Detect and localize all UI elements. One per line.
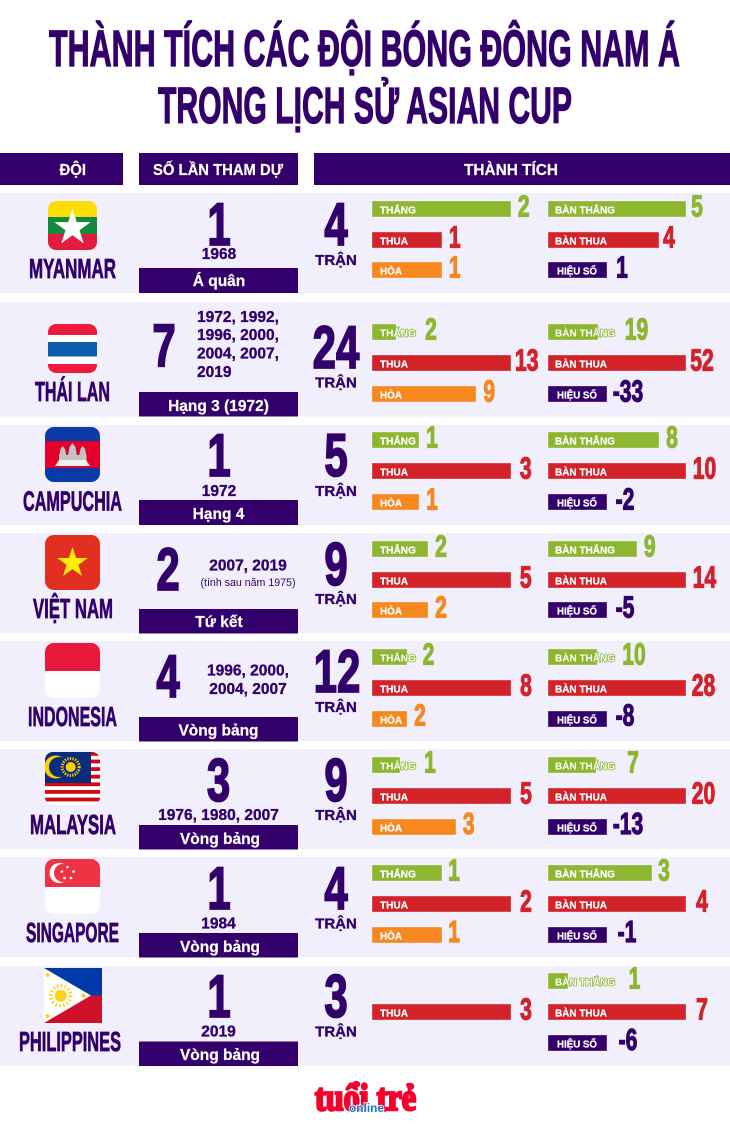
stat: wins: 1 — [426, 419, 438, 455]
stat: goal difference — [548, 481, 634, 517]
best result — [139, 268, 298, 293]
stat: losses — [372, 667, 532, 703]
stat: goals for — [548, 636, 646, 672]
best result: Vòng bảng — [178, 722, 259, 740]
matches: 24 — [313, 314, 360, 381]
stat: goal difference: -1 — [618, 914, 636, 949]
matches: TRẬN — [315, 698, 357, 716]
stat: losses: 5 — [520, 775, 532, 811]
stat: goals for: 5 — [691, 188, 703, 224]
participation count: 3 — [207, 747, 230, 814]
best result: Hạng 4 — [193, 506, 245, 523]
years — [197, 309, 279, 381]
stat: goals against: 14 — [693, 559, 716, 595]
matches — [315, 422, 357, 500]
stat: losses: 3 — [520, 450, 532, 486]
stat: goal difference — [548, 806, 643, 841]
stat: goals against — [548, 667, 715, 703]
stat: losses: 8 — [520, 667, 532, 703]
stat: goals for: BÀN THẮNG — [555, 652, 615, 664]
years: 1972 — [202, 483, 236, 500]
stat: losses: THUA — [380, 1008, 408, 1020]
stat: goal difference: 1 — [616, 249, 628, 285]
stat: goal difference: HIỆU SỐ — [557, 264, 597, 278]
stat: goals against — [548, 450, 716, 486]
stat: draws: 2 — [414, 697, 426, 733]
stat: goal difference: HIỆU SỐ — [557, 496, 597, 510]
stat: goal difference: -5 — [616, 589, 634, 625]
stat: goal difference — [548, 697, 634, 733]
panel: Thailand — [0, 302, 730, 416]
stat: draws — [372, 481, 438, 517]
years: 2019 — [201, 1024, 236, 1040]
stat: wins: THẮNG — [380, 326, 416, 340]
team name: THÁI LAN — [35, 376, 110, 407]
years: 1996, 2000, — [207, 662, 289, 680]
stat: losses: THUA — [380, 792, 408, 804]
panel: Philippines — [0, 960, 730, 1066]
panel: Vietnam — [0, 528, 730, 634]
icon: Singapore flag — [45, 859, 100, 914]
matches: 4 — [324, 855, 348, 922]
stat: losses: THUA — [380, 576, 408, 588]
matches: TRẬN — [315, 806, 357, 824]
stat: draws: HÒA — [380, 822, 402, 834]
icon: Cambodia flag — [45, 427, 100, 482]
stat: draws: HÒA — [380, 496, 402, 510]
years: 1972, 1992, — [197, 309, 279, 326]
stat: wins: THẮNG — [380, 760, 416, 772]
stat: goals against: 52 — [690, 342, 714, 378]
matches — [315, 855, 357, 932]
years: 1996, 2000, — [197, 327, 279, 344]
stat: goal difference — [548, 373, 643, 409]
stat: goal difference: -33 — [613, 373, 643, 409]
best result — [139, 609, 298, 634]
years: 2004, 2007, — [197, 346, 279, 362]
stat: draws — [372, 806, 475, 841]
stat: goals for — [548, 188, 703, 224]
icon: Vietnam flag — [45, 535, 100, 590]
stat: goals for — [548, 419, 678, 455]
stat: draws — [372, 914, 460, 949]
stat: goal difference: HIỆU SỐ — [557, 388, 597, 402]
stat: goal difference: HIỆU SỐ — [557, 820, 597, 834]
stat: draws — [372, 249, 461, 285]
stat: losses: 3 — [520, 991, 532, 1027]
stat: goal difference — [548, 589, 634, 625]
participation count: 1 — [207, 963, 231, 1030]
stat: wins — [372, 188, 530, 224]
stat: goals for: BÀN THẮNG — [555, 326, 615, 340]
stat: goals against: 10 — [693, 450, 716, 486]
team name: SINGAPORE — [26, 917, 119, 948]
stat: draws: 3 — [463, 806, 475, 841]
stat: losses — [372, 450, 532, 486]
participation count: 2 — [156, 536, 180, 603]
stat: losses: THUA — [380, 900, 408, 912]
stat: wins: THẮNG — [380, 544, 416, 556]
stat: goals against: BÀN THUA — [555, 574, 607, 588]
stat: wins: 2 — [425, 311, 437, 347]
team name: CAMPUCHIA — [23, 486, 122, 516]
stat: draws: 2 — [435, 589, 447, 625]
years: 1976, 1980, 2007 — [158, 807, 279, 824]
stat: goal difference: HIỆU SỐ — [557, 712, 597, 726]
stat: goal difference: HIỆU SỐ — [557, 604, 597, 618]
stat: draws — [372, 697, 426, 733]
stat: wins: 1 — [448, 852, 460, 888]
stat: goals for: BÀN THẮNG — [555, 868, 615, 880]
panel: Malaysia — [0, 744, 730, 850]
stat: draws: 9 — [483, 373, 495, 409]
stat: goals for: 8 — [666, 419, 678, 455]
stat: goals against: BÀN THUA — [555, 790, 607, 804]
stat: draws: HÒA — [380, 930, 402, 942]
stat: losses: THUA — [380, 358, 408, 370]
stat: wins — [372, 311, 437, 347]
stat: draws — [372, 373, 495, 409]
stat: draws: 1 — [448, 914, 460, 949]
stat: losses: 1 — [449, 219, 461, 255]
stat: losses: 2 — [520, 883, 532, 919]
stat: goal difference: HIỆU SỐ — [557, 1036, 597, 1050]
years: 2004, 2007 — [209, 681, 287, 698]
stat: goals for: BÀN THẮNG — [555, 434, 615, 448]
matches: 9 — [324, 747, 348, 814]
stat: goals for — [548, 311, 648, 347]
stat: goal difference: -8 — [616, 697, 634, 733]
stat: goals for — [548, 960, 640, 996]
stat: losses: THUA — [380, 236, 408, 248]
stat: goals against: 28 — [692, 667, 715, 703]
stat: goals for: 19 — [625, 311, 648, 347]
stat: wins: 2 — [435, 528, 447, 564]
stat: draws: 1 — [449, 249, 461, 285]
stat: goals against — [548, 559, 716, 595]
matches: 4 — [324, 191, 348, 258]
stat: goals against — [548, 991, 708, 1027]
panel: Cambodia — [0, 419, 730, 525]
matches: TRẬN — [315, 1022, 357, 1040]
stat: goals against: BÀN THUA — [555, 466, 607, 478]
stat: draws: HÒA — [380, 714, 402, 726]
icon: Myanmar flag — [48, 201, 97, 250]
best result — [139, 933, 298, 958]
team name: PHILIPPINES — [19, 1026, 121, 1057]
participation count: 4 — [156, 643, 180, 710]
stat: goal difference: -2 — [616, 481, 634, 517]
stat: goal difference: -13 — [613, 806, 643, 841]
stat: goals against: BÀN THUA — [555, 898, 607, 912]
team name: VIỆT NAM — [33, 593, 113, 624]
stat: losses — [372, 342, 538, 378]
matches: TRẬN — [315, 590, 357, 608]
table header: SỐ LẦN THAM DỰ — [153, 159, 284, 179]
stat: goals for: BÀN THẮNG — [555, 976, 615, 988]
matches: 9 — [324, 531, 348, 598]
best result: Vòng bảng — [180, 939, 260, 956]
participation count: 1 — [207, 855, 231, 922]
stat: losses — [372, 219, 461, 255]
stat: goals for — [548, 528, 656, 564]
best result: Vòng bảng — [180, 831, 260, 848]
best result — [139, 825, 298, 850]
stat: wins: THẮNG — [380, 204, 416, 216]
stat: goals against: 4 — [696, 883, 708, 919]
best result — [139, 392, 298, 416]
icon: Thailand flag — [48, 324, 97, 373]
stat: draws: HÒA — [380, 604, 402, 618]
matches — [315, 191, 357, 269]
stat: goals against: BÀN THUA — [555, 682, 607, 696]
stat: goal difference — [548, 914, 636, 949]
matches: TRẬN — [315, 914, 357, 932]
stat: draws: HÒA — [380, 388, 402, 402]
stat: goals for: 10 — [622, 636, 646, 672]
matches: TRẬN — [315, 251, 357, 269]
stat: wins: 2 — [518, 188, 530, 224]
best result: Vòng bảng — [180, 1047, 260, 1064]
stat: wins — [372, 852, 460, 888]
stat: goal difference: HIỆU SỐ — [557, 928, 597, 942]
stat: losses: THUA — [380, 684, 408, 696]
panel: Indonesia — [0, 636, 730, 742]
stat: goals for: 9 — [644, 528, 656, 564]
table header: THÀNH TÍCH — [464, 160, 558, 179]
stat: goals against: BÀN THUA — [555, 1006, 607, 1020]
matches — [315, 747, 357, 824]
table header: ĐỘI — [60, 160, 86, 179]
panel: Singapore — [0, 852, 730, 958]
stat: wins: THẮNG — [380, 652, 416, 664]
stat: goals against — [548, 219, 675, 255]
stat: goal difference — [548, 1022, 637, 1057]
years — [200, 558, 296, 589]
years: 2019 — [197, 364, 232, 381]
team name: MYANMAR — [29, 253, 116, 284]
stat: wins — [372, 744, 436, 780]
logo: Tuổi Trẻ Online: online — [349, 1103, 384, 1115]
matches: TRẬN — [315, 374, 357, 392]
stat: draws: HÒA — [380, 264, 402, 278]
years: 1968 — [202, 246, 237, 263]
stat: goals against — [548, 883, 708, 919]
stat: goals against: 4 — [663, 219, 675, 255]
stat: wins: 1 — [424, 744, 436, 780]
stat: goals for: 7 — [627, 744, 639, 780]
stat: goals for — [548, 744, 639, 780]
best result — [139, 500, 298, 525]
stat: goals for: BÀN THẮNG — [555, 544, 615, 556]
matches — [315, 531, 357, 608]
years: 1984 — [201, 916, 236, 932]
stat: losses — [372, 991, 532, 1027]
team name: INDONESIA — [28, 701, 117, 732]
stat: goals for: 3 — [658, 852, 670, 888]
logo: Tuổi Trẻ Online: tuổi trẻ — [315, 1077, 416, 1119]
title — [49, 19, 680, 134]
stat: wins — [372, 636, 434, 672]
participation count: 1 — [207, 422, 231, 489]
best result — [139, 717, 298, 742]
stat: draws: 1 — [426, 481, 438, 517]
matches: 3 — [324, 963, 348, 1030]
matches: 5 — [324, 422, 348, 489]
stat: goals against: 20 — [692, 775, 715, 811]
years: 2007, 2019 — [209, 558, 287, 574]
best result — [139, 1042, 298, 1066]
stat: goals against: BÀN THUA — [555, 234, 607, 248]
participation count: 1 — [207, 191, 231, 258]
stat: goals for — [548, 852, 670, 888]
stat: goal difference: -6 — [619, 1022, 637, 1057]
stat: losses: 13 — [515, 342, 538, 378]
best result: Á quân — [193, 273, 245, 290]
stat: wins — [372, 528, 447, 564]
years: (tính sau năm 1975) — [200, 577, 296, 589]
stat: losses: THUA — [380, 466, 408, 478]
stat: wins — [372, 419, 438, 455]
matches — [315, 963, 357, 1040]
icon: Philippines flag — [44, 968, 102, 1023]
stat: goal difference — [548, 249, 628, 285]
matches: TRẬN — [315, 482, 357, 500]
panel: Myanmar — [0, 188, 730, 293]
participation count: 7 — [152, 312, 176, 379]
stat: wins: THẮNG — [380, 868, 416, 880]
stat: goals for: BÀN THẮNG — [555, 204, 615, 216]
best result: Hạng 3 (1972) — [168, 398, 269, 415]
stat: losses — [372, 559, 532, 595]
stat: goals against — [548, 775, 715, 811]
stat: goals against: BÀN THUA — [555, 358, 607, 370]
stat: wins: THẮNG — [380, 434, 416, 448]
stat: losses — [372, 883, 532, 919]
stat: goals for: BÀN THẮNG — [555, 760, 615, 772]
matches: 12 — [314, 638, 360, 705]
table header — [0, 153, 730, 185]
years — [207, 662, 289, 698]
stat: wins: 2 — [423, 636, 434, 672]
icon: Malaysia flag — [44, 752, 100, 805]
stat: goals for: 1 — [629, 960, 640, 996]
team name: MALAYSIA — [30, 809, 116, 840]
stat: losses: 5 — [520, 559, 532, 595]
best result: Tứ kết — [195, 614, 243, 631]
stat: goals against: 7 — [696, 991, 708, 1027]
stat: draws — [372, 589, 447, 625]
stat: goals against — [548, 342, 714, 378]
stat: losses — [372, 775, 532, 811]
icon: Indonesia flag — [45, 643, 100, 698]
